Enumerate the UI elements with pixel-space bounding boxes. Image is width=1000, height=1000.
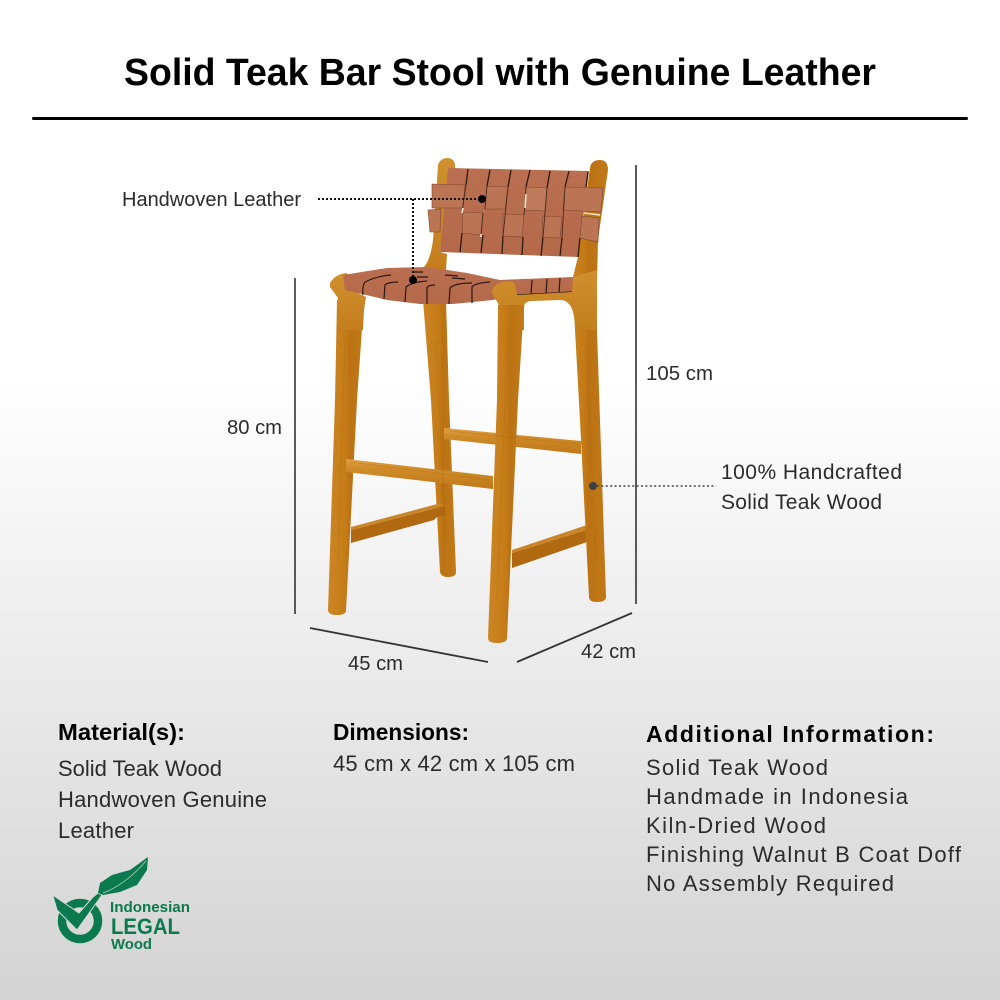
dimension line: depth bbox=[517, 613, 632, 662]
dimension line: seat height bbox=[294, 278, 296, 614]
dimensions block: Dimensions: bbox=[333, 719, 469, 745]
additional information block: Handmade in Indonesia bbox=[646, 784, 909, 809]
left side rail bbox=[351, 503, 446, 543]
label: solid teak: 100% Handcrafted bbox=[721, 461, 902, 484]
label: 105 cm: 105 cm bbox=[646, 363, 713, 385]
rail face bbox=[351, 506, 446, 543]
materials block: Solid Teak Wood bbox=[58, 756, 222, 781]
leader dot: seat bbox=[409, 276, 417, 284]
additional information block: Additional Information: bbox=[646, 721, 934, 747]
rail top facet bbox=[512, 524, 596, 553]
logo text: Wood: Wood bbox=[111, 936, 152, 953]
additional information block: Finishing Walnut B Coat Doff bbox=[646, 842, 962, 867]
dotted leader: teak wood bbox=[597, 485, 716, 487]
front right leg bbox=[488, 305, 524, 643]
seat surface bbox=[343, 267, 573, 304]
back left post bbox=[423, 158, 455, 270]
seat right rail and front knob bbox=[492, 270, 597, 330]
logo ring bbox=[62, 903, 98, 939]
dimension line: width bbox=[310, 628, 488, 662]
front rail bbox=[346, 459, 493, 489]
logo text: LEGAL: LEGAL bbox=[111, 914, 180, 939]
dimensions block: 45 cm x 42 cm x 105 cm bbox=[333, 751, 575, 776]
title: Solid Teak Bar Stool with Genuine Leather bbox=[124, 52, 876, 94]
logo text: Indonesian: Indonesian bbox=[110, 899, 190, 916]
label: solid teak: Solid Teak Wood bbox=[721, 491, 882, 514]
back leather panel bbox=[428, 168, 603, 257]
label: 45 cm: 45 cm bbox=[348, 653, 403, 675]
leaf veins bbox=[103, 861, 146, 893]
right side rail bbox=[512, 524, 597, 568]
rear right post and leg bbox=[560, 160, 608, 602]
seat right gaps bbox=[517, 278, 572, 295]
dotted leader: handwoven leather bbox=[318, 199, 482, 281]
front left leg bbox=[328, 300, 364, 615]
rail top facet bbox=[351, 503, 444, 530]
label: 80 cm: 80 cm bbox=[227, 417, 282, 439]
dimensions block bbox=[333, 719, 575, 776]
additional information block: Kiln-Dried Wood bbox=[646, 813, 826, 838]
wood grain bbox=[338, 330, 596, 600]
materials block: Handwoven Genuine bbox=[58, 787, 267, 812]
horizontal woven cells bbox=[428, 184, 603, 242]
top row gaps bbox=[466, 169, 588, 188]
bottom row gaps bbox=[460, 233, 580, 257]
logo: Indonesian Legal Wood bbox=[53, 857, 190, 953]
back rail bbox=[444, 428, 581, 454]
dimension line: total height bbox=[635, 165, 637, 604]
rail face bbox=[512, 527, 597, 568]
title rule bbox=[32, 117, 968, 120]
seat leather bbox=[343, 267, 573, 304]
seat front arcs and gaps bbox=[363, 275, 490, 304]
seat rear gaps bbox=[412, 272, 465, 279]
materials block: Leather bbox=[58, 818, 134, 843]
logo leaf bbox=[98, 857, 148, 895]
additional information block bbox=[646, 721, 962, 896]
stool illustration bbox=[328, 158, 608, 643]
additional information block: Solid Teak Wood bbox=[646, 755, 828, 780]
seat left knob bbox=[330, 273, 366, 330]
materials block: Material(s): bbox=[58, 719, 185, 745]
logo check mark bbox=[53, 893, 102, 930]
leader dot: back bbox=[478, 195, 486, 203]
light gaps bbox=[462, 194, 600, 237]
materials block bbox=[58, 719, 267, 843]
label: handwoven leather: Handwoven Leather bbox=[122, 189, 301, 211]
additional information block: No Assembly Required bbox=[646, 871, 894, 896]
back left leg bbox=[423, 300, 456, 577]
label: solid teak bbox=[721, 461, 902, 514]
leader dot: leg bbox=[589, 482, 597, 490]
label: 42 cm: 42 cm bbox=[581, 641, 636, 663]
vertical strip edges bbox=[462, 185, 565, 238]
woven base bbox=[440, 168, 589, 257]
